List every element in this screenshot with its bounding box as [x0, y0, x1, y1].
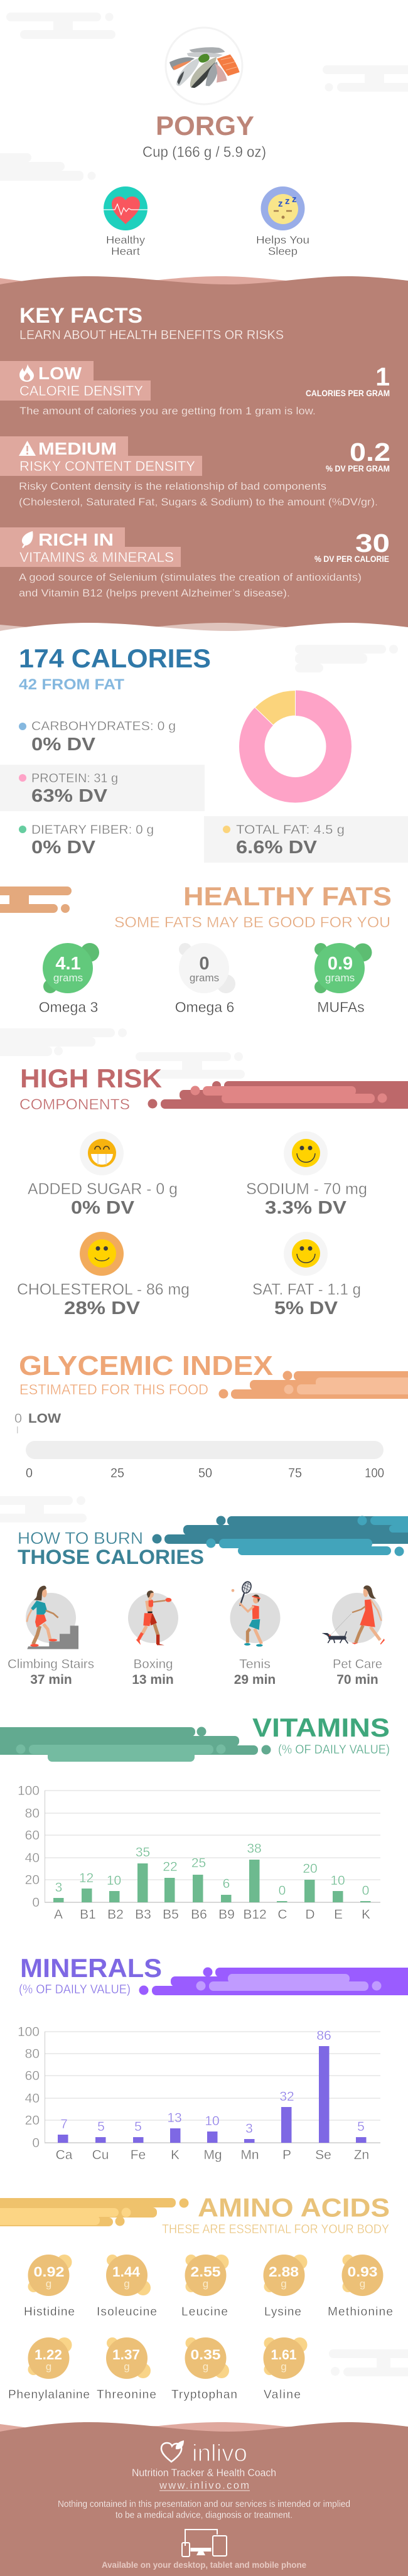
saturated fat: SAT. FAT - 1.1 g: [252, 1281, 361, 1298]
bar chart: vitamins: C: [277, 1907, 287, 1922]
amino: methionine: Methionine: [328, 2305, 393, 2319]
disclaimer: Nothing contained in this presentation and our services is intended or implied: [58, 2499, 350, 2509]
mufas: 0.9: [328, 954, 353, 974]
legend: protein: [0, 765, 205, 811]
bar chart: vitamins: E: [334, 1907, 343, 1922]
panel: key facts: [0, 276, 408, 635]
panel: high risk components: [0, 1028, 408, 1318]
amino: methionine: g: [360, 2278, 365, 2290]
amino: valine: Valine: [264, 2388, 301, 2401]
saturated fat: 5% DV: [274, 1298, 338, 1318]
decorative blob: healthy fats: [0, 887, 72, 913]
bar chart: vitamins: 20: [303, 1862, 318, 1876]
bar chart: minerals: 60: [25, 2069, 40, 2083]
bar chart: minerals: 32: [279, 2089, 294, 2104]
panel: healthy fats: [0, 881, 392, 1015]
amino: isoleucine: g: [124, 2278, 130, 2290]
decorative blob: glycemic: [218, 1371, 408, 1399]
decorative blob: minerals: [139, 1968, 408, 1995]
amino: phenylalanine: g: [46, 2361, 51, 2373]
bar chart: vitamins: 6: [223, 1877, 230, 1891]
omega 6: [175, 943, 235, 1015]
amino: phenylalanine: Phenylalanine: [8, 2388, 90, 2401]
glycemic scale bar: [26, 1441, 384, 1459]
helps you sleep label: Helps You: [256, 234, 309, 246]
healthy heart label: Heart: [111, 245, 140, 257]
icon: devices: [182, 2530, 227, 2557]
omega 6: 0: [199, 954, 210, 974]
brand name: inlivo: [192, 2440, 247, 2467]
amino: tryptophan: g: [203, 2361, 208, 2373]
bar chart: vitamins: D: [305, 1907, 315, 1922]
bar chart: vitamins: 0: [362, 1883, 369, 1898]
activity: pet care: [322, 1585, 385, 1644]
amino: leucine: Leucine: [181, 2305, 228, 2319]
burn heading line 1: HOW TO BURN: [18, 1529, 143, 1548]
bar chart: minerals: Mn: [240, 2148, 259, 2162]
panel: amino acids: [0, 2192, 408, 2401]
amino: valine: g: [281, 2361, 287, 2373]
icon: helps you sleep: z: [292, 194, 296, 205]
decorative blob: burn: [152, 1516, 408, 1556]
bar chart: vitamins: B5: [163, 1907, 179, 1922]
bar chart: minerals: Se: [315, 2148, 331, 2162]
disclaimer: to be a medical advice, diagnosis or treatment.: [115, 2510, 293, 2520]
bar chart: vitamins: A: [54, 1907, 63, 1922]
glycemic index subheading: ESTIMATED FOR THIS FOOD: [19, 1381, 208, 1398]
amino: isoleucine: Isoleucine: [97, 2305, 157, 2319]
glycemic scale labels: [26, 1466, 384, 1480]
bar chart: vitamins: 80: [25, 1806, 40, 1821]
bar chart: minerals: 10: [205, 2114, 220, 2128]
bar chart: vitamins: 60: [25, 1828, 40, 1843]
decorative blob: amino acids: [0, 2198, 188, 2226]
panel: vitamins: [0, 1713, 390, 1922]
amino: valine: [264, 2337, 308, 2401]
glycemic scale labels: 50: [198, 1466, 212, 1480]
fact: medium risky content density: (Cholesterol, Saturated Fat, Sugars & Sodium) to the amount (%DV/gr).: [19, 497, 378, 508]
minerals subheading: (% OF DAILY VALUE): [19, 1983, 131, 1997]
healthy fats subheading: SOME FATS MAY BE GOOD FOR YOU: [114, 914, 390, 931]
climbing stairs label: [8, 1657, 94, 1687]
bar chart: vitamins: 20: [25, 1873, 40, 1887]
bar chart: vitamins: 10: [107, 1873, 121, 1888]
decorative blob: high risk: [148, 1081, 408, 1109]
amino: histidine: [24, 2255, 75, 2319]
bar chart: vitamins: B2: [107, 1907, 124, 1922]
bar chart: vitamins: 25: [191, 1856, 206, 1870]
header panel: [0, 13, 408, 257]
climbing stairs label: 37 min: [30, 1673, 72, 1687]
glycemic scale labels: 75: [288, 1466, 302, 1480]
tennis label: 29 min: [234, 1673, 276, 1687]
bar chart: vitamins: 0: [279, 1883, 286, 1898]
amino: methionine: 0.93: [348, 2264, 378, 2280]
amino: threonine: 1.37: [112, 2347, 140, 2363]
bar chart: vitamins: B1: [80, 1907, 96, 1922]
activity: climbing stairs: [26, 1586, 78, 1649]
amino: lysine: [264, 2255, 308, 2319]
bar chart: vitamins: [18, 1784, 380, 1922]
glycemic marker: 0: [14, 1411, 22, 1426]
burn heading line 2: THOSE CALORIES: [18, 1546, 204, 1568]
omega 6: grams: [190, 972, 219, 984]
bar chart: minerals: Ca: [56, 2148, 73, 2162]
legend: protein: 63% DV: [31, 786, 108, 806]
legend: dietary fiber: 0% DV: [31, 838, 96, 858]
omega 6: Omega 6: [175, 999, 234, 1015]
boxing label: 13 min: [132, 1673, 174, 1687]
bar chart: vitamins: 22: [163, 1860, 178, 1874]
fact: low calorie density: CALORIES PER GRAM: [306, 389, 390, 398]
bar chart: vitamins: 35: [136, 1845, 150, 1860]
vitamins heading: VITAMINS: [252, 1713, 390, 1742]
amino: histidine: 0.92: [34, 2264, 64, 2280]
cholesterol: [17, 1232, 190, 1318]
amino: tryptophan: Tryptophan: [171, 2388, 237, 2401]
minerals heading: MINERALS: [20, 1953, 162, 1983]
bar chart: minerals: 20: [25, 2113, 40, 2128]
amino acids subheading: THESE ARE ESSENTIAL FOR YOUR BODY: [162, 2223, 389, 2236]
amino: lysine: g: [281, 2278, 287, 2290]
calories from fat: 42 FROM FAT: [19, 676, 124, 693]
bar chart: minerals: 3: [245, 2121, 253, 2136]
decorative blob: vitamins: [0, 1727, 271, 1762]
glycemic scale labels: 100: [365, 1466, 384, 1480]
legend: carbohydrates: 0% DV: [31, 735, 96, 755]
icon: healthy heart: [104, 186, 148, 230]
fact: medium risky content density: Risky Content density is the relationship of bad components: [19, 481, 326, 492]
healthy heart label: [106, 234, 145, 257]
legend: total fat: [204, 816, 408, 863]
amino: tryptophan: [171, 2337, 237, 2401]
mufas: MUFAs: [317, 999, 365, 1015]
bar chart: vitamins: B12: [243, 1907, 267, 1922]
vitamins subheading: (% OF DAILY VALUE): [278, 1743, 390, 1757]
fact: rich in vitamins and minerals: RICH IN: [38, 530, 114, 549]
climbing stairs label: Climbing Stairs: [8, 1657, 94, 1671]
bar chart: minerals: 80: [25, 2047, 40, 2061]
fact: low calorie density: The amount of calories you are getting from 1 gram is low.: [19, 406, 316, 417]
food image: fish in circle: [166, 28, 242, 104]
sodium: SODIUM - 70 mg: [246, 1180, 367, 1198]
bar chart: minerals: Fe: [131, 2148, 146, 2162]
amino: histidine: Histidine: [24, 2305, 75, 2319]
bar chart: minerals: 5: [357, 2120, 365, 2134]
added sugar: 0% DV: [71, 1198, 135, 1218]
icon: helps you sleep: [261, 186, 305, 230]
amino: leucine: [181, 2255, 228, 2319]
fact: low calorie density: CALORIE DENSITY: [19, 383, 143, 399]
glycemic index heading: GLYCEMIC INDEX: [19, 1350, 273, 1381]
bar chart: minerals: 86: [316, 2029, 331, 2043]
tagline: Nutrition Tracker & Health Coach: [132, 2467, 276, 2479]
panel: calories: [0, 644, 408, 863]
bar chart: minerals: 100: [18, 2025, 40, 2039]
activity: tennis: [230, 1580, 280, 1647]
legend: dietary fiber: DIETARY FIBER: 0 g: [31, 823, 154, 837]
fact: low calorie density: 1: [375, 362, 390, 391]
fact: medium risky content density: [0, 436, 390, 508]
bar chart: minerals: Mg: [203, 2148, 222, 2162]
icon: helps you sleep: z: [285, 196, 290, 207]
amino: methionine: [328, 2255, 393, 2319]
amino: threonine: Threonine: [97, 2388, 156, 2401]
legend: protein: PROTEIN: 31 g: [31, 772, 118, 785]
bar chart: minerals: 13: [167, 2111, 182, 2125]
bar chart: minerals: 40: [25, 2091, 40, 2106]
pet care label: [333, 1657, 382, 1687]
fact: medium risky content density: % DV PER GRAM: [326, 464, 390, 473]
amino: histidine: g: [46, 2278, 51, 2290]
bar chart: minerals: P: [282, 2148, 291, 2162]
cholesterol: 28% DV: [64, 1298, 141, 1318]
glycemic marker: [14, 1411, 61, 1433]
bar chart: minerals: 0: [32, 2136, 40, 2150]
bar chart: vitamins: 3: [55, 1880, 62, 1895]
high risk subheading: COMPONENTS: [19, 1096, 130, 1113]
legend: carbohydrates: [19, 719, 176, 755]
omega 3: [39, 943, 99, 1015]
availability note: Available on your desktop, tablet and mobile phone: [102, 2560, 306, 2570]
fact: low calorie density: [0, 361, 390, 417]
key facts subheading: LEARN ABOUT HEALTH BENEFITS OR RISKS: [19, 328, 284, 342]
panel: footer: [0, 2422, 408, 2576]
glycemic scale labels: 25: [110, 1466, 124, 1480]
legend: total fat: TOTAL FAT: 4.5 g: [236, 823, 345, 837]
omega 3: grams: [53, 972, 83, 984]
legend: dietary fiber: [19, 823, 154, 858]
pet care label: 70 min: [336, 1673, 378, 1687]
pet care label: Pet Care: [333, 1657, 382, 1671]
mufas: [314, 943, 372, 1015]
bar chart: minerals: Cu: [92, 2148, 109, 2162]
bar chart: minerals: 5: [134, 2120, 142, 2134]
bar chart: minerals: Zn: [354, 2148, 369, 2162]
mufas: grams: [325, 972, 355, 984]
bar chart: minerals: 7: [60, 2117, 68, 2131]
omega 3: Omega 3: [39, 999, 98, 1015]
fact: rich in vitamins and minerals: A good source of Selenium (stimulates the creation of antioxidants): [19, 572, 362, 583]
tennis label: [234, 1657, 276, 1687]
title: PORGY: [156, 111, 254, 141]
icon: inlivo logo heart: [161, 2440, 184, 2462]
amino: phenylalanine: [8, 2337, 90, 2401]
panel: minerals: [18, 1953, 408, 2162]
saturated fat: [252, 1232, 361, 1318]
glycemic marker: LOW: [28, 1411, 61, 1426]
donut chart: [252, 691, 339, 790]
added sugar: ADDED SUGAR - 0 g: [28, 1180, 178, 1198]
fact: rich in vitamins and minerals: % DV PER CALORIE: [314, 554, 389, 564]
fact: rich in vitamins and minerals: and Vitamin B12 (helps prevent Alzheimer’s disease).: [19, 588, 290, 599]
serving size: Cup (166 g / 5.9 oz): [142, 144, 266, 161]
amino acids heading: AMINO ACIDS: [198, 2192, 390, 2223]
amino: phenylalanine: 1.22: [35, 2347, 62, 2363]
bar chart: vitamins: 10: [330, 1873, 345, 1888]
amino: tryptophan: 0.35: [191, 2347, 221, 2363]
website: www.inlivo.com: [159, 2480, 249, 2491]
amino: lysine: 2.88: [269, 2264, 299, 2280]
fact: rich in vitamins and minerals: VITAMINS & MINERALS: [19, 549, 174, 565]
helps you sleep label: [256, 234, 309, 257]
bar chart: vitamins: B9: [218, 1907, 235, 1922]
disclaimer: [58, 2499, 350, 2520]
bar chart: vitamins: 0: [32, 1895, 40, 1910]
legend: carbohydrates: CARBOHYDRATES: 0 g: [31, 719, 176, 733]
bar chart: vitamins: 38: [247, 1841, 262, 1856]
omega 3: 4.1: [55, 954, 81, 974]
amino: leucine: 2.55: [191, 2264, 221, 2280]
fact: rich in vitamins and minerals: 30: [355, 529, 390, 558]
fact: low calorie density: LOW: [38, 364, 82, 383]
fact: medium risky content density: 0.2: [350, 438, 390, 466]
calories heading: 174 CALORIES: [19, 644, 211, 673]
bar chart: vitamins: B3: [135, 1907, 151, 1922]
panel: how to burn calories: [0, 1496, 408, 1687]
bar chart: minerals: K: [171, 2148, 180, 2162]
glycemic scale labels: 0: [26, 1466, 33, 1480]
panel: glycemic index: [14, 1350, 408, 1480]
amino: threonine: g: [124, 2361, 130, 2373]
bar chart: vitamins: K: [362, 1907, 370, 1922]
tennis label: Tenis: [239, 1657, 271, 1671]
amino: isoleucine: 1.44: [112, 2264, 141, 2280]
high risk heading: HIGH RISK: [20, 1064, 162, 1093]
added sugar: [28, 1131, 178, 1218]
icon: helps you sleep: z: [278, 198, 282, 209]
bar chart: minerals: [18, 2025, 380, 2162]
key facts heading: KEY FACTS: [19, 304, 142, 328]
amino: valine: 1.61: [271, 2347, 296, 2363]
fact: medium risky content density: MEDIUM: [38, 439, 117, 458]
activity: boxing: [128, 1590, 178, 1645]
amino: lysine: Lysine: [264, 2305, 301, 2319]
sodium: [246, 1131, 367, 1218]
healthy fats heading: HEALTHY FATS: [183, 881, 392, 911]
legend: total fat: 6.6% DV: [236, 838, 318, 858]
bar chart: vitamins: B6: [191, 1907, 207, 1922]
amino: threonine: [97, 2337, 156, 2401]
amino: leucine: g: [203, 2278, 208, 2290]
bar chart: minerals: 5: [97, 2120, 105, 2134]
boxing label: Boxing: [133, 1657, 173, 1671]
bar chart: vitamins: 12: [79, 1871, 94, 1885]
bar chart: vitamins: 40: [25, 1851, 40, 1865]
sodium: 3.3% DV: [265, 1198, 347, 1218]
helps you sleep label: Sleep: [268, 245, 298, 257]
boxing label: [132, 1657, 174, 1687]
fact: medium risky content density: RISKY CONTENT DENSITY: [19, 458, 195, 474]
cholesterol: CHOLESTEROL - 86 mg: [17, 1281, 190, 1298]
fact: rich in vitamins and minerals: [0, 527, 390, 599]
amino: isoleucine: [97, 2255, 157, 2319]
bar chart: vitamins: 100: [18, 1784, 40, 1798]
healthy heart label: Healthy: [106, 234, 145, 246]
